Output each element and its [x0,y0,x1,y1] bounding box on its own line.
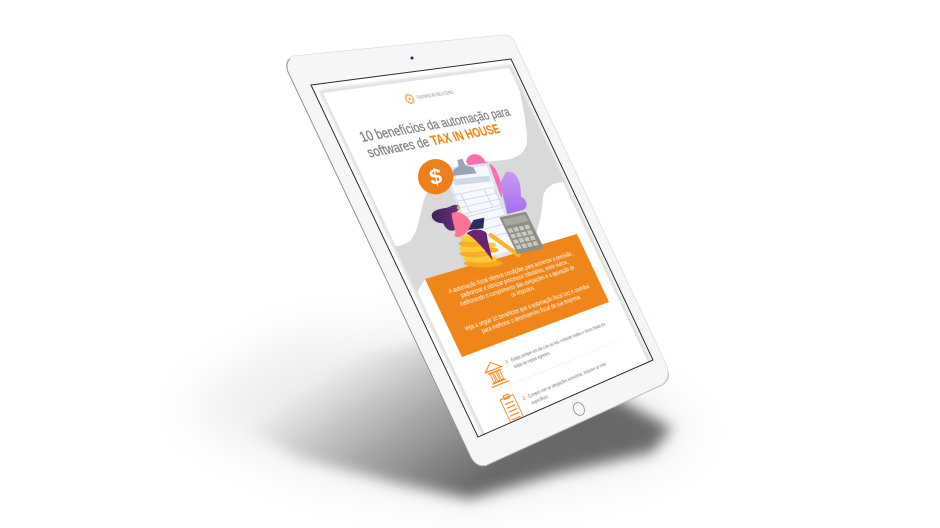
screen [311,59,653,437]
stack of coins [459,235,503,267]
intro paragraph line 2: padronizar e otimizar processos tributários, entre outros, [459,258,569,299]
woman sitting on coins [432,205,518,267]
title line 1: 10 benefícios da automação para [357,105,512,145]
screen black border [311,59,653,437]
icon: clipboard [500,393,524,423]
pencil [491,235,518,255]
dollar coin: $ [427,163,444,190]
hair clip [457,206,460,209]
intro paragraph line 1: A automação fiscal oferece condições para aumentar a precisão, [447,250,573,295]
laptop [468,218,484,230]
pink leaf [466,154,502,197]
document page content [357,90,617,423]
clipboard clip [452,159,477,176]
document sheet edges [322,67,649,434]
screen artwork [310,58,654,438]
grey background blob [395,84,565,292]
logo [404,90,455,104]
illustration [418,154,544,267]
calculator [499,212,544,254]
second paragraph line 1: Veja a seguir 10 benefícios que a automação fiscal traz e contribui [463,283,590,332]
list item 1 text line 1: Esteja sempre em dia com as leis, evitando multas e riscos legais por [510,322,606,363]
orange intro panel [425,234,609,357]
camera [410,56,414,60]
clipboard header bar [453,176,491,185]
list item 2 text line 2: específicas. [530,394,550,406]
logo wordmark: THOMSON REUTERS [416,90,455,100]
tablet right metal edge [487,372,668,465]
second paragraph line 2: para melhorar o desempenho fiscal da sua empresa. [480,293,582,335]
logo icon [404,94,415,104]
home button [571,401,587,417]
clipboard [443,159,521,264]
title line 2: softwares de TAX IN HOUSE [364,122,502,161]
icon: bank [484,362,510,388]
list item 1 text line 2: todas as regras vigentes. [513,350,551,370]
hair [432,205,460,231]
list item 2 number: 2 [522,396,526,401]
intro paragraph line 3: melhorando o cumprimento das obrigações e a apuração de [458,264,576,307]
trousers [467,230,493,261]
torso [452,212,472,237]
clipboard table [452,187,512,237]
list divider [491,341,617,393]
list item 2 text line 1: Cumpra com as obrigações acessórias, inclusive as mais [527,361,607,399]
tablet left metal edge [287,59,485,466]
tablet frame [286,35,668,466]
purple leaf [500,172,527,214]
list item 1 number: 1 [505,359,509,365]
intro paragraph line 4: os impostos. [509,284,536,298]
